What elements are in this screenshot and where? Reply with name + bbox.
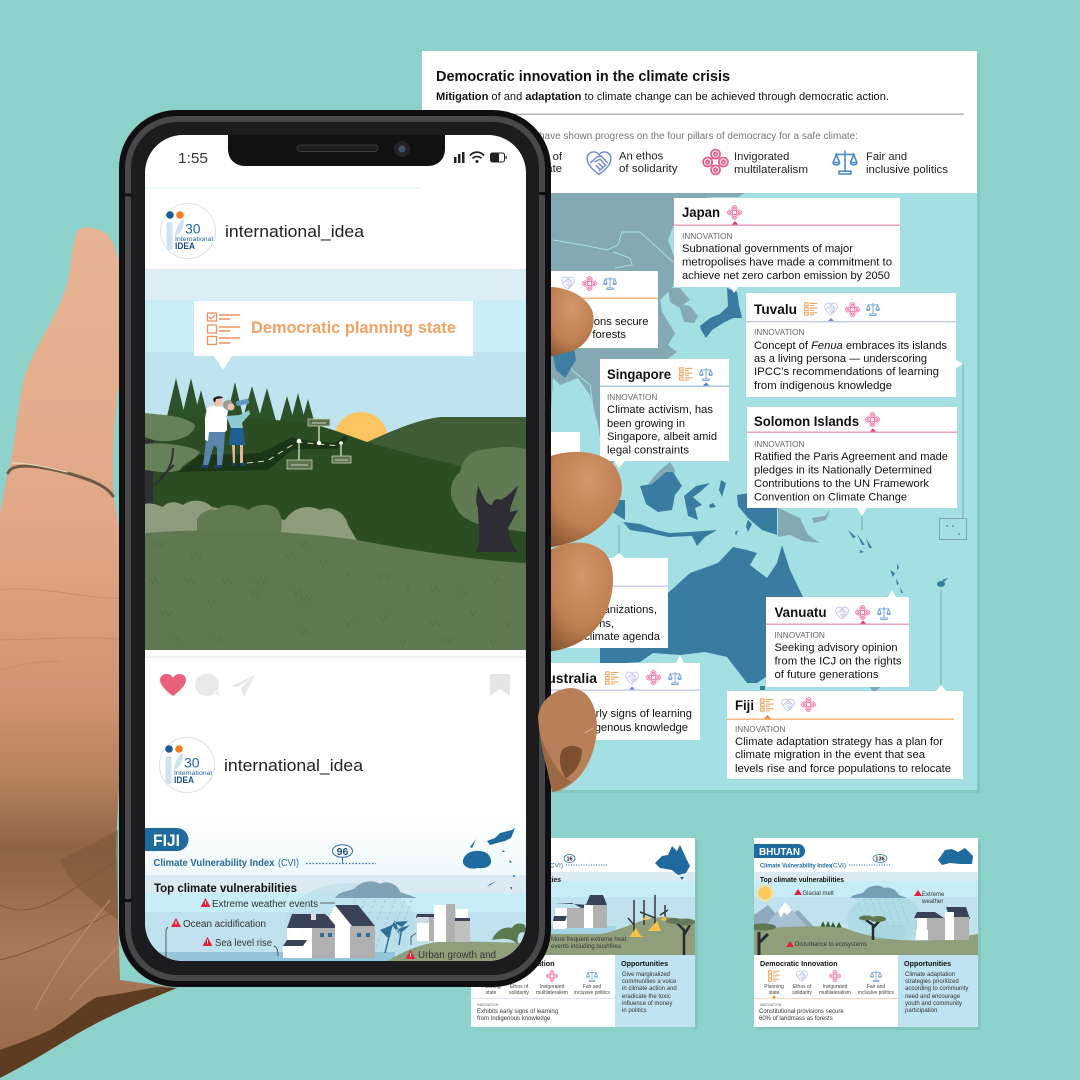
dark hill [145, 417, 526, 575]
CVI scale: (CVI) [831, 862, 846, 870]
card: Vanuatu [766, 590, 909, 687]
card: Fiji: levels rise and force populations to relocate [735, 763, 951, 775]
grass marks [150, 540, 511, 646]
Opportunities section: Give marginalized [622, 972, 670, 978]
Borneo north grey [648, 462, 675, 487]
card: Singapore: legal constraints [607, 444, 689, 456]
CVI scale: (CVI) [548, 862, 563, 870]
card: Tuvalu: INNOVATION [754, 327, 804, 337]
card: partially hidden country: influence the climate agenda [518, 631, 661, 643]
card: Australia: Exhibits early signs of learning [541, 708, 692, 720]
tag: FIJI [145, 828, 188, 851]
card: Singapore: been growing in [607, 418, 685, 430]
heading: Top climate vulnerabilities [154, 881, 297, 895]
card: Fiji: Fiji [735, 697, 754, 713]
card: Japan: metropolises have made a commitment to [682, 256, 892, 268]
Opportunities section: participation [905, 1008, 937, 1014]
Democratic Innovation section: Planning [481, 984, 501, 990]
card: Tuvalu: Concept of Fenua embraces its islands [754, 340, 947, 352]
card: Solomon Islands: pledges in its Nationally Determined [754, 464, 932, 476]
Democratic Innovation section: Ethos of [793, 984, 812, 990]
card: Solomon Islands: Convention on Climate Change [754, 492, 907, 504]
label: ocean acidification: Ocean acidification [183, 918, 266, 930]
Opportunities section: Opportunities [904, 959, 951, 968]
Democratic Innovation section: inclusive politics [574, 990, 610, 996]
label: glacial melt: Glacial melt [802, 891, 834, 897]
legend: fair and inclusive politics [833, 151, 948, 176]
scene: houses, storm and shore [145, 881, 526, 967]
card: Vanuatu: Seeking advisory opinion [774, 642, 898, 654]
card: Tuvalu: from indigenous knowledge [754, 380, 892, 392]
Democratic Innovation section: INNOVATION [477, 1003, 499, 1007]
card: Australia: Australia [537, 670, 597, 686]
icon: send [231, 675, 255, 697]
card: Solomon Islands: INNOVATION [754, 439, 804, 449]
icon: checklist [208, 313, 240, 344]
card: Japan: Japan [682, 204, 720, 220]
card: Vanuatu: INNOVATION [774, 630, 825, 640]
status bar time: 1:55 [178, 151, 208, 167]
logo: International IDEA second post: International [174, 770, 212, 777]
Opportunities section: communities a voice [622, 979, 677, 985]
Democratic Innovation section: solidarity [792, 990, 812, 996]
phone body [119, 110, 551, 987]
green palm [492, 923, 526, 945]
small grey island [870, 687, 880, 691]
divider and post action bar [145, 656, 526, 697]
card: Bhutan [489, 271, 658, 348]
legend: invigorated multilateralism: Invigorated [734, 151, 789, 163]
bushes [145, 501, 358, 545]
Opportunities section: Climate adaptation [905, 972, 955, 978]
card: Singapore: Singapore [607, 366, 671, 382]
subheading: Mitigation of and adaptation to climate change can be achieved through democratic action. [436, 91, 889, 103]
icon: heart [160, 674, 186, 696]
illustration: democratic planning state [145, 269, 526, 650]
account name: international_idea [225, 222, 365, 241]
Australia card shadow [695, 841, 698, 1030]
Democratic Innovation section: inclusive politics [858, 990, 894, 996]
CVI scale: Climate Vulnerability Index [154, 857, 275, 869]
Vanuatu islands [890, 563, 903, 593]
left tree [145, 413, 200, 507]
illustration: bushfire landscape [544, 895, 695, 955]
Democratic Innovation section: multilateralism [536, 990, 568, 996]
CVI scale: 16 [566, 856, 573, 862]
card: Solomon Islands: Contributions to the UN Framework [754, 478, 929, 490]
card: Bhutan: 60% of landmass as forests [489, 329, 626, 341]
tag: BHUTAN: BHUTAN [759, 847, 800, 858]
card: partially hidden country [500, 432, 668, 648]
Democratic Innovation section: Fair and [583, 984, 601, 990]
label: extreme weather: weather [921, 899, 943, 905]
notch [228, 135, 445, 166]
ring [8, 466, 113, 496]
card: Vanuatu: Vanuatu [774, 604, 826, 620]
panel: democratic innovation map infographic [422, 51, 980, 793]
right hill [367, 417, 526, 560]
Japan [700, 288, 742, 338]
Democratic Innovation section: Ethos of [510, 984, 529, 990]
CVI scale: 136 [875, 856, 885, 862]
label: extreme weather events: Extreme weather events [212, 898, 318, 910]
Democratic Innovation section: Exhibits early signs of learning [477, 1009, 558, 1015]
card: Tuvalu: IPCC’s recommendations of learning [754, 366, 939, 378]
logo: International IDEA second post [160, 738, 214, 792]
card: Japan [674, 198, 900, 293]
right tree [451, 447, 526, 552]
legend: planning state: Democratic planning of [448, 151, 563, 163]
legend: invigorated multilateralism [703, 150, 808, 176]
Opportunities section [621, 959, 677, 1014]
Western New Guinea [737, 493, 777, 535]
status bar icons [454, 152, 507, 163]
people with binoculars [200, 396, 250, 468]
logo: International IDEA: IDEA [175, 241, 195, 251]
Sumatra [612, 500, 625, 520]
Fiji islands [937, 578, 948, 587]
card: partially hidden country: Civil society organizations, [525, 604, 657, 616]
legend: ethos of solidarity: An ethos [619, 150, 664, 162]
card: Australia [500, 655, 700, 740]
card: Australia: from indigenous knowledge [552, 722, 688, 734]
trail [178, 436, 349, 472]
Democratic Innovation section: from Indigenous knowledge [477, 1016, 551, 1022]
legend: fair and inclusive politics: inclusive politics [866, 164, 948, 176]
Asia mainland grey [551, 193, 745, 464]
pine trees [165, 378, 316, 428]
Democratic Innovation section [754, 959, 898, 1022]
legend: planning state: state [538, 163, 562, 175]
label: extreme weather [914, 890, 944, 903]
card: Fiji: Climate adaptation strategy has a plan for [735, 736, 943, 748]
label: ecosystems: Disturbance to ecosystems [795, 942, 867, 948]
label: sea level rise: Sea level rise [215, 937, 272, 949]
card: Bhutan: Constitutional provisions secure [491, 316, 648, 328]
logo: International IDEA [160, 204, 216, 258]
Democratic Innovation section: Democratic Innovation [760, 959, 837, 968]
Korea [668, 288, 698, 323]
map: Fiji [463, 828, 516, 890]
Moluccas [709, 480, 752, 536]
heading: Top climate vulnerabilities [477, 875, 561, 884]
callout: democratic planning state [194, 301, 473, 370]
label: extreme weather: Extreme [922, 892, 945, 898]
CVI scale: Climate Vulnerability Index [477, 862, 549, 870]
card: Singapore: Singapore, albeit amid [607, 431, 717, 443]
hand: palm and thumb [0, 228, 177, 1078]
Sulawesi [684, 483, 710, 520]
icon: bookmark [490, 674, 510, 696]
city buildings [416, 914, 435, 918]
CVI scale: 96 [337, 846, 348, 858]
card: Tuvalu: Tuvalu [754, 301, 797, 317]
illustration: mountains and village [750, 884, 978, 955]
heading: Top climate vulnerabilities [760, 875, 844, 884]
label: heat events [551, 936, 626, 950]
panel: Bhutan mini infographic [750, 838, 981, 1030]
foreground meadow [145, 530, 526, 650]
Borneo [640, 472, 682, 512]
legend: fair and inclusive politics: Fair and [866, 151, 907, 163]
callout: democratic planning state: Democratic planning state [251, 319, 456, 337]
hand: finger overlapping phone edge [538, 688, 597, 792]
Democratic Innovation section: state [486, 990, 497, 996]
card: Solomon Islands: Ratified the Paris Agreement and made [754, 451, 948, 463]
Opportunities section: according to community [905, 986, 968, 992]
logo: International IDEA second post: IDEA [174, 775, 194, 785]
card: Japan: Subnational governments of major [682, 243, 853, 255]
connector lines [619, 364, 963, 685]
Democratic Innovation section: Invigorated [823, 984, 848, 990]
card: Singapore [600, 359, 729, 468]
card: Solomon Islands: Solomon Islands [754, 413, 859, 429]
phone [119, 110, 551, 987]
legend intro: These countries have shown progress on the four pillars of democracy for a safe climate: [465, 131, 858, 142]
panel: Australia mini infographic [471, 838, 695, 1027]
card: Vanuatu: of future generations [774, 669, 879, 681]
map: Bhutan [938, 848, 973, 865]
China border lines [548, 232, 673, 420]
sun [334, 412, 388, 466]
card: Tuvalu: as a living persona — underscoring [754, 353, 927, 365]
Democratic Innovation section: INNOVATION [760, 1003, 782, 1007]
card: Tuvalu [746, 293, 963, 397]
Opportunities section: strategies prioritized [905, 979, 959, 985]
Solomon Islands [848, 530, 872, 553]
map: Australia [655, 845, 690, 880]
Democratic Innovation section: Planning [764, 984, 784, 990]
palms [385, 925, 402, 953]
map background [422, 193, 977, 790]
Democratic Innovation section: Constitutional provisions secure [759, 1009, 844, 1015]
Tuvalu inset box [940, 518, 966, 540]
Java and Lesser Sunda [623, 522, 717, 546]
Democratic Innovation section: 60% of landmass as forests [759, 1016, 833, 1022]
card: Singapore: INNOVATION [607, 392, 657, 402]
tag: FIJI: FIJI [153, 831, 180, 850]
icon: multilateralism [728, 206, 741, 219]
label: glacial melt [794, 889, 834, 895]
hand lower shadow [0, 987, 177, 1078]
CVI scale: Climate Vulnerability Index [760, 862, 832, 870]
Opportunities section: Opportunities [621, 959, 668, 968]
logo: International IDEA: International [175, 236, 213, 243]
legend: ethos of solidarity [587, 150, 678, 175]
CVI scale [551, 854, 607, 869]
Democratic Innovation section: Democratic Innovation [477, 959, 554, 968]
icon: comment [195, 674, 220, 696]
Australia [600, 545, 803, 683]
label: heat events: More frequent extreme heat [551, 936, 627, 943]
illustration: Fiji country card [145, 812, 526, 967]
account name second post: international_idea [224, 756, 364, 775]
Papua New Guinea [778, 508, 820, 543]
Democratic Innovation section: solidarity [509, 990, 529, 996]
CVI scale [760, 854, 890, 870]
connector lines [166, 903, 416, 960]
label: heat events: events including bushfires [551, 943, 621, 950]
Opportunities section: in climate action and [622, 986, 677, 992]
logo: International IDEA: 30 [185, 220, 201, 236]
legend: invigorated multilateralism: multilateralism [734, 164, 808, 176]
tag: BHUTAN [754, 844, 805, 858]
Opportunities section: youth and community [905, 1001, 962, 1007]
Democratic Innovation section: Fair and [867, 984, 885, 990]
Opportunities section: need and encourage [905, 994, 961, 1000]
Bangladesh and Myanmar highlight [552, 349, 576, 378]
phone screen [145, 187, 526, 967]
CVI scale: (CVI) [278, 857, 299, 869]
Democratic Innovation section [471, 959, 615, 1022]
card: Fiji: INNOVATION [735, 724, 785, 734]
card: Singapore: Climate activism, has [607, 404, 713, 416]
Opportunities section: in politics [622, 1008, 647, 1014]
Opportunities section: influence of money [622, 1001, 672, 1007]
card: partially hidden country: trade unions, [549, 618, 614, 630]
Democratic Innovation section: multilateralism [819, 990, 851, 996]
legend: planning state [448, 151, 563, 175]
card: Japan: achieve net zero carbon emission by 2050 [682, 270, 890, 282]
Opportunities section [904, 959, 968, 1014]
legend: ethos of solidarity: of solidarity [619, 163, 678, 175]
CVI scale [154, 845, 376, 869]
label: urban growth: Urban growth and [418, 949, 496, 961]
logo: International IDEA second post: 30 [184, 754, 200, 770]
heading: Democratic innovation in the climate crisis [436, 68, 730, 85]
card: Fiji [727, 685, 963, 779]
card: Fiji: climate migration in the event that sea [735, 749, 926, 761]
Opportunities section: eradicate the toxic [622, 994, 671, 1000]
map: countries [551, 193, 967, 691]
Democratic Innovation section: state [769, 990, 780, 996]
card: Solomon Islands [747, 407, 957, 516]
Democratic Innovation section: Invigorated [540, 984, 565, 990]
trail milestones [287, 419, 351, 469]
hand: fingers behind phone edge [545, 287, 622, 652]
card: Vanuatu: from the ICJ on the rights [774, 656, 902, 668]
card: Japan: INNOVATION [682, 231, 732, 241]
